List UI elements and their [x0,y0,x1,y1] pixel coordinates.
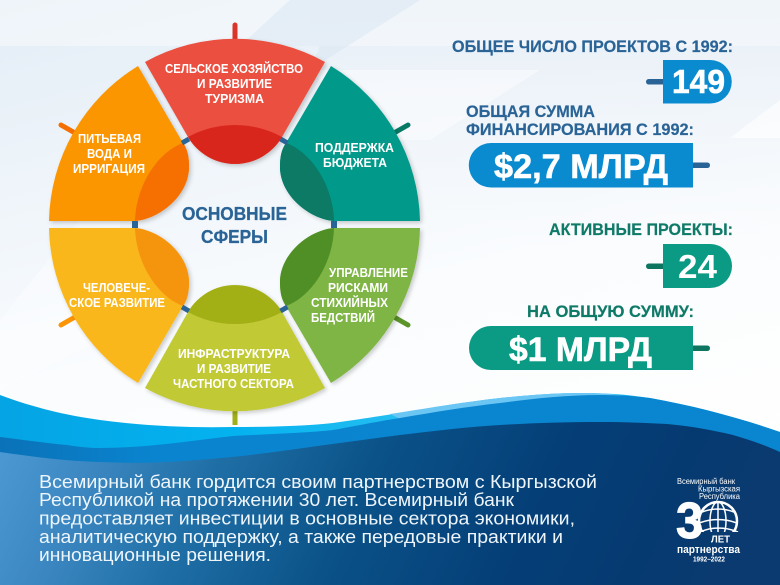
segment: drinking water and irrigation [49,66,189,221]
wheel center title: ОСНОВНЫЕ [182,203,287,224]
stat: 149 projects: 149 [672,63,725,100]
logo: World Bank 30 years of partnership: Кыргызская [698,484,740,494]
label: infrastructure and private sector: И РАЗВИТИЕ [197,362,271,376]
wave: bright blue layer [0,393,780,585]
heading: active projects: АКТИВНЫЕ ПРОЕКТЫ: [549,221,733,239]
label: drinking water and irrigation [73,132,145,176]
segment: infrastructure and private sector [145,285,325,411]
logo: World Bank 30 years of partnership: 3 [676,492,703,549]
logo: World Bank 30 years of partnership: 1992–2022 [693,556,725,564]
footer text block: инновационные решения. [39,545,271,565]
label: disaster risk management: СТИХИЙНЫХ [311,295,389,310]
label: drinking water and irrigation: ПИТЬЕВАЯ [78,132,141,146]
footer text block: аналитическую поддержку, а также передовые практики и [39,527,563,547]
stat: 2.7 billion [469,143,710,188]
wheel center title [182,203,287,247]
connector: small dark blue links [132,137,337,313]
label: disaster risk management: РИСКАМИ [328,281,388,295]
logo: World Bank 30 years of partnership: ЛЕТ [711,534,731,546]
label: budget support [315,141,394,170]
label: human development: СКОЕ РАЗВИТИЕ [69,296,165,310]
icon: globe [698,500,738,532]
label: disaster risk management [311,266,408,325]
footer text block: предоставляет инвестиции в основные сектора экономики, [39,508,575,528]
heading: total financing [466,103,694,139]
label: disaster risk management: БЕДСТВИЙ [311,310,375,325]
footer text block [39,472,597,565]
footer text block: Всемирный банк гордится своим партнерством с Кыргызской [39,472,597,492]
logo: World Bank 30 years of partnership: Всемирный банк [677,477,735,486]
stat: 24 active projects [646,244,732,288]
label: infrastructure and private sector [173,347,294,391]
label: drinking water and irrigation: ВОДА И [87,147,132,161]
label: drinking water and irrigation: ИРРИГАЦИЯ [73,162,145,176]
stat: 24 active projects: 24 [678,248,718,285]
segment: human development [49,228,189,383]
label: infrastructure and private sector: ЧАСТНОГО СЕКТОРА [173,377,294,391]
stat: 2.7 billion: $2,7 МЛРД [494,148,668,186]
logo: World Bank 30 years of partnership: Республика [699,492,741,501]
stat: 149 projects [646,60,732,104]
segment: agriculture and tourism [145,39,325,164]
segment: budget support [280,66,420,221]
wave: mid blue layer [0,395,780,585]
wheel center title: СФЕРЫ [201,226,268,247]
label: agriculture and tourism: ТУРИЗМА [205,92,264,106]
footer text block: Республикой на протяжении 30 лет. Всемирный банк [39,490,514,510]
label: infrastructure and private sector: ИНФРАСТРУКТУРА [178,347,290,361]
heading: total projects: ОБЩЕЕ ЧИСЛО ПРОЕКТОВ С 1992: [452,38,733,56]
wave: dark footer panel [0,422,780,585]
label: budget support: ПОДДЕРЖКА [315,141,394,155]
label: human development [69,281,165,310]
label: human development: ЧЕЛОВЕЧЕ- [83,281,150,295]
tick marks around the wheel [61,25,408,425]
wave: light sliver highlight [390,393,625,419]
heading: total financing: ОБЩАЯ СУММА [466,103,595,121]
label: budget support: БЮДЖЕТА [323,156,387,170]
logo: World Bank 30 years of partnership [676,477,741,564]
label: agriculture and tourism: СЕЛЬСКОЕ ХОЗЯЙСТВО [165,61,303,76]
heading: total financing: ФИНАНСИРОВАНИЯ С 1992: [466,121,694,139]
segment: disaster risk management [280,228,420,383]
logo: World Bank 30 years of partnership: партнерства [677,544,741,556]
label: agriculture and tourism: И РАЗВИТИЕ [197,77,272,91]
stat: 1 billion [469,326,710,370]
heading: total amount: НА ОБЩУЮ СУММУ: [527,303,694,321]
wheel chart: main sectors [49,25,420,425]
label: disaster risk management: УПРАВЛЕНИЕ [329,266,408,280]
stat: 1 billion: $1 МЛРД [509,331,652,369]
label: agriculture and tourism [165,61,303,106]
